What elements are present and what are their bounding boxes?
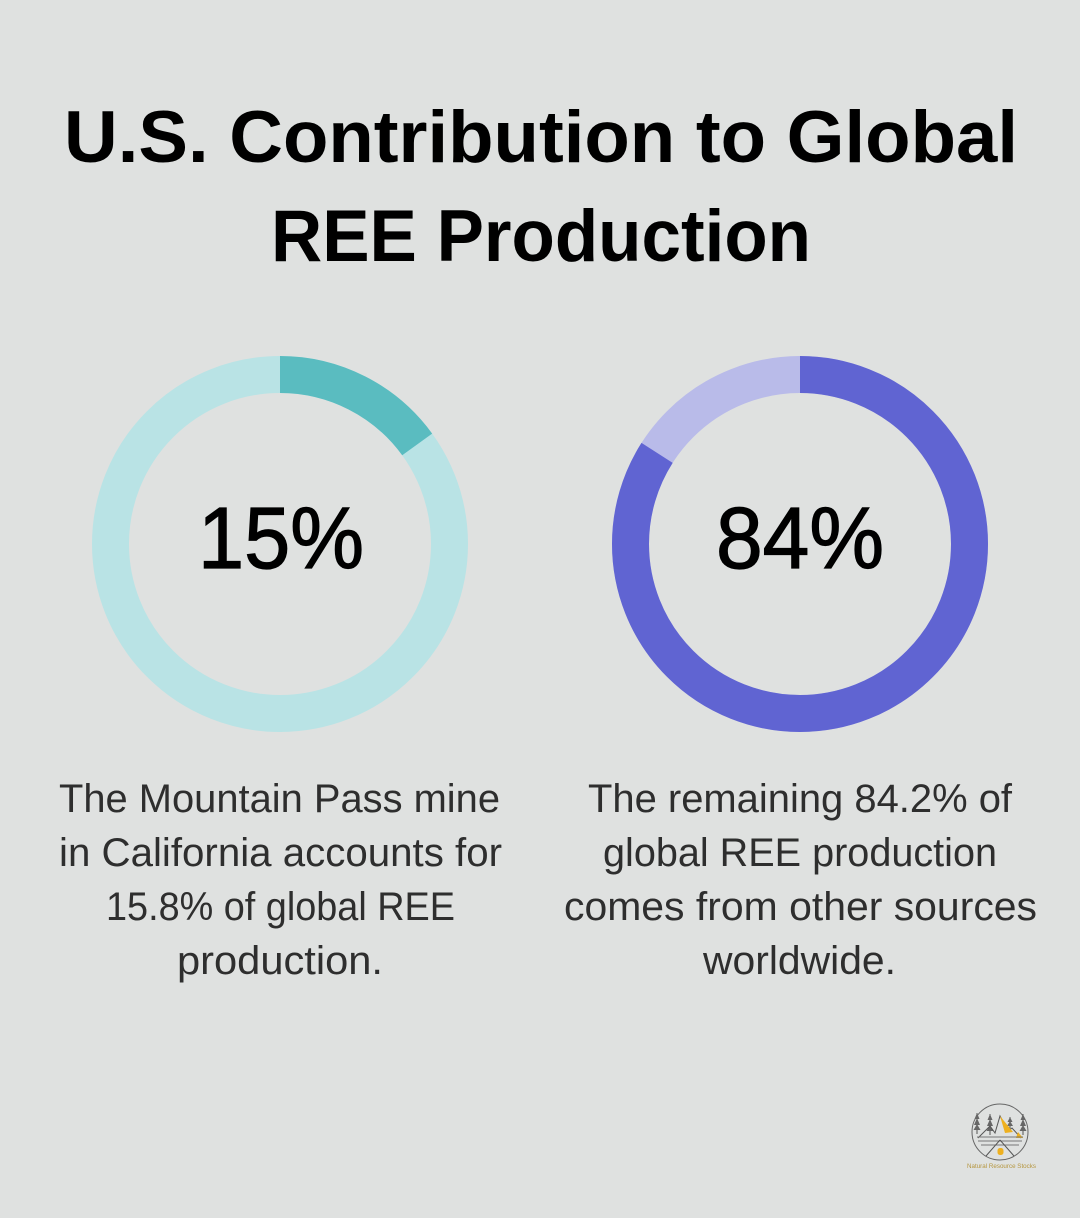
logo: Natural Resource Stocks: Natural Resource Stocks [967,1163,1037,1170]
text block: Mountain Pass description: 15.8% of global REE [106,885,455,929]
text block: other sources description [564,777,1037,983]
text block: other sources description: The remaining 84.2% of [588,777,1013,821]
text block: other sources description: worldwide. [702,939,896,983]
value: 15%: 15% [198,490,364,587]
text block: Mountain Pass description [59,777,502,983]
donut chart: 84% [630,374,970,714]
text block: Mountain Pass description: production. [177,939,383,983]
title: U.S. Contribution to Global [64,97,1018,178]
text block: Mountain Pass description: in California accounts for [59,831,502,875]
text block: other sources description: comes from other sources [564,885,1037,929]
donut chart: 15% [110,374,450,714]
title [64,97,1018,277]
text block: Mountain Pass description: The Mountain Pass mine [59,777,500,821]
value: 84%: 84% [716,490,884,587]
title: REE Production [271,196,811,277]
logo: Natural Resource Stocks [967,1104,1037,1170]
text block: other sources description: global REE production [603,831,997,875]
